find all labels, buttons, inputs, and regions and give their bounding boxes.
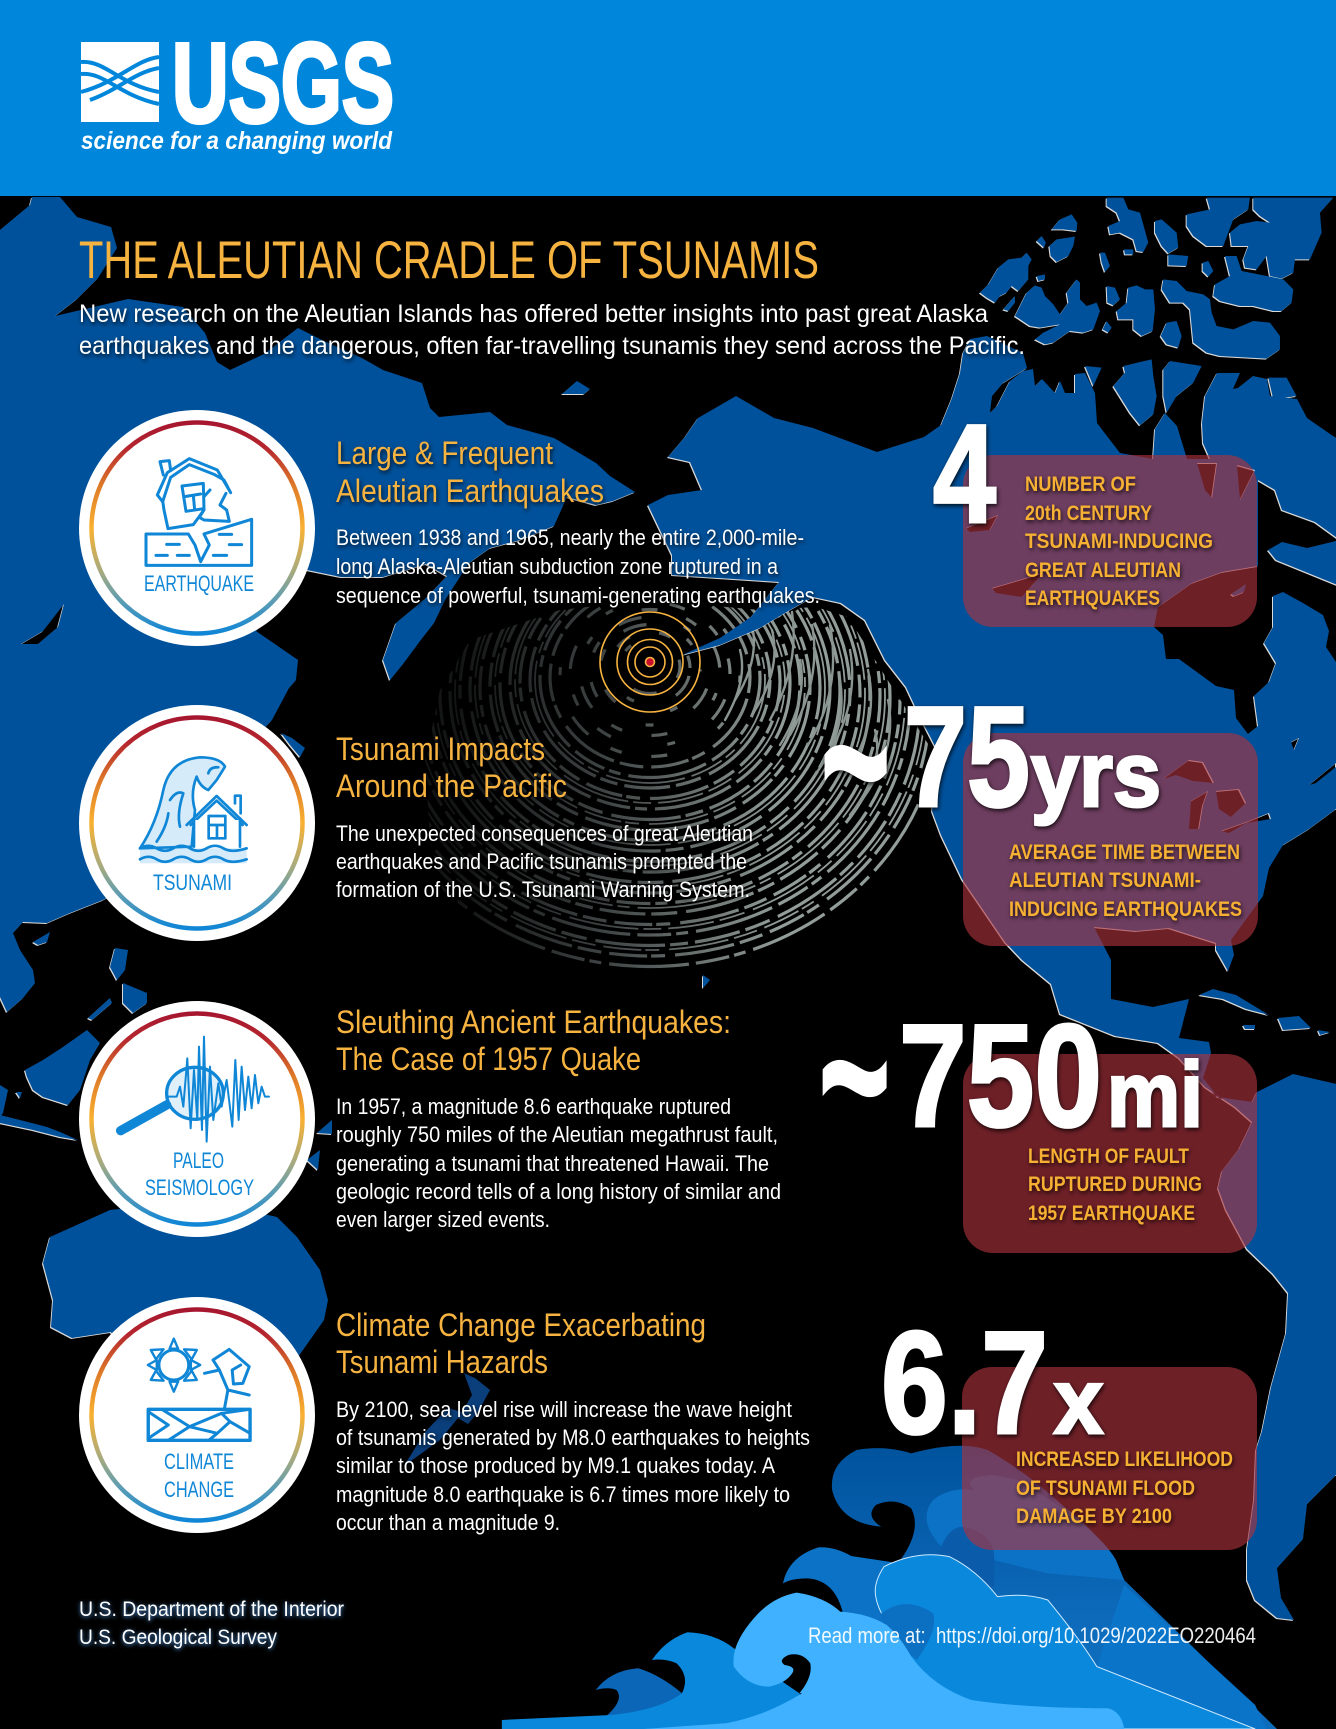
body: climate change: of tsunamis generated by M8.0 earthquakes to heights bbox=[336, 1425, 810, 1450]
body: paleoseismology: even larger sized events. bbox=[336, 1207, 550, 1232]
Australia bbox=[43, 1200, 328, 1400]
Canadian Arctic archipelago bbox=[980, 198, 1333, 425]
Caribbean islands bbox=[703, 975, 1330, 1035]
stat number: yrs bbox=[1031, 724, 1161, 826]
body: tsunami bbox=[336, 821, 753, 902]
body: earthquake: Between 1938 and 1965, nearly the entire 2,000-mile- bbox=[336, 525, 804, 550]
heading: tsunami impacts bbox=[336, 731, 567, 804]
mid wave spot bbox=[881, 1604, 934, 1660]
header band bbox=[0, 0, 1336, 196]
intro text bbox=[79, 300, 1025, 360]
icon badge: tsunami: TSUNAMI bbox=[153, 870, 232, 895]
heading: large and frequent: Large & Frequent bbox=[336, 435, 553, 471]
icon badge: climate change: CLIMATE bbox=[164, 1449, 234, 1474]
logo wordmark: USGS bbox=[172, 20, 394, 146]
heading: climate change bbox=[336, 1307, 706, 1380]
epicenter rings bbox=[600, 612, 700, 712]
New Zealand bbox=[404, 1373, 490, 1466]
section: earthquake bbox=[79, 410, 820, 646]
back wave bbox=[832, 1446, 1277, 1729]
tsunami ripple pattern bbox=[425, 602, 928, 968]
body: paleoseismology: roughly 750 miles of the Aleutian megathrust fault, bbox=[336, 1122, 778, 1147]
inner dark crest bbox=[917, 1527, 994, 1587]
section: climate change bbox=[79, 1297, 810, 1535]
body: climate change bbox=[336, 1397, 810, 1535]
stat caption bbox=[1028, 1145, 1202, 1225]
heading: large and frequent bbox=[336, 435, 604, 509]
heading: climate change: Tsunami Hazards bbox=[336, 1344, 548, 1380]
stat number: x bbox=[1054, 1351, 1103, 1453]
body: earthquake: sequence of powerful, tsunami-generating earthquakes. bbox=[336, 583, 820, 608]
Asia bbox=[0, 197, 635, 1012]
stat caption: RUPTURED DURING bbox=[1028, 1173, 1202, 1196]
stat caption: INDUCING EARTHQUAKES bbox=[1009, 898, 1242, 921]
logo tagline: science for a changing world bbox=[81, 127, 393, 155]
stat caption: GREAT ALEUTIAN bbox=[1025, 559, 1181, 582]
section: paleoseismology bbox=[79, 1001, 781, 1237]
title: THE ALEUTIAN CRADLE OF TSUNAMIS bbox=[79, 231, 819, 290]
heading: sleuthing ancient earthquakes bbox=[336, 1004, 731, 1077]
stat caption: 1957 EARTHQUAKE bbox=[1028, 1202, 1195, 1225]
USGS logo bbox=[81, 20, 394, 155]
body: paleoseismology: geologic record tells of a long history of similar and bbox=[336, 1179, 781, 1204]
body: earthquake bbox=[336, 525, 820, 608]
stat panel: 75 years bbox=[821, 643, 1258, 946]
heading: large and frequent: Aleutian Earthquakes bbox=[336, 473, 604, 509]
far left small wave bbox=[596, 1668, 682, 1720]
Asian islands bbox=[0, 381, 590, 1170]
front wave bbox=[644, 1593, 1124, 1729]
stat number: 75 bbox=[904, 678, 1030, 837]
stat number: 4 bbox=[933, 395, 996, 552]
stat caption: DAMAGE BY 2100 bbox=[1016, 1505, 1172, 1528]
stat box bbox=[962, 1367, 1257, 1550]
stat box bbox=[963, 1054, 1257, 1253]
mid wave bbox=[875, 1555, 1255, 1729]
heading: sleuthing ancient earthquakes: Sleuthing Ancient Earthquakes: bbox=[336, 1004, 731, 1040]
back wave inner crest bbox=[927, 1475, 1124, 1580]
body: paleoseismology bbox=[336, 1094, 781, 1232]
icon badge: earthquake bbox=[79, 410, 315, 646]
stat panel: 6.7 times bbox=[881, 1301, 1257, 1550]
body: climate change: By 2100, sea level rise will increase the wave height bbox=[336, 1397, 792, 1422]
stat number: 750 bbox=[899, 994, 1102, 1157]
heading: climate change: Climate Change Exacerbating bbox=[336, 1307, 706, 1343]
icon badge: paleoseismology bbox=[79, 1001, 315, 1237]
intro text: earthquakes and the dangerous, often far-travelling tsunamis they send across the Pacific. bbox=[79, 332, 1025, 360]
heading: sleuthing ancient earthquakes: The Case of 1957 Quake bbox=[336, 1041, 641, 1077]
body: climate change: similar to those produced by M9.1 quakes today. A bbox=[336, 1453, 775, 1478]
body: tsunami: The unexpected consequences of great Aleutian bbox=[336, 821, 753, 846]
stat box bbox=[963, 733, 1258, 946]
left back wave bbox=[783, 1547, 895, 1633]
intro text: New research on the Aleutian Islands has offered better insights into past great Alaska bbox=[79, 300, 988, 328]
icon badge: paleoseismology: PALEO bbox=[173, 1148, 224, 1173]
stat panel: 750 miles bbox=[819, 958, 1257, 1253]
stat caption: OF TSUNAMI FLOOD bbox=[1016, 1477, 1195, 1500]
footer agency text: U.S. Department of the Interior bbox=[79, 1598, 344, 1621]
stat caption: 20th CENTURY bbox=[1025, 502, 1152, 525]
icon badge: climate change bbox=[79, 1297, 315, 1533]
stat number bbox=[819, 958, 1203, 1193]
footer agency text bbox=[79, 1598, 344, 1649]
heading: tsunami impacts: Tsunami Impacts bbox=[336, 731, 545, 767]
stat caption bbox=[1009, 841, 1242, 921]
icon badge: tsunami bbox=[79, 705, 315, 941]
icon badge: paleoseismology: SEISMOLOGY bbox=[145, 1175, 254, 1200]
read more link text: Read more at: https://doi.org/10.1029/2022EO220464 bbox=[808, 1623, 1256, 1648]
stat caption: EARTHQUAKES bbox=[1025, 587, 1160, 610]
stat caption: ALEUTIAN TSUNAMI- bbox=[1009, 869, 1201, 892]
stat panel: 4 bbox=[933, 395, 1257, 627]
stat number bbox=[821, 643, 1161, 878]
North and South America with Hudson Bay and lakes bbox=[648, 336, 1336, 1620]
body: tsunami: formation of the U.S. Tsunami Warning System. bbox=[336, 877, 750, 902]
left mid wave bbox=[502, 1632, 818, 1729]
body: paleoseismology: generating a tsunami that threatened Hawaii. The bbox=[336, 1151, 769, 1176]
body: tsunami: earthquakes and Pacific tsunamis prompted the bbox=[336, 849, 747, 874]
stat caption bbox=[1016, 1448, 1233, 1528]
stat caption: TSUNAMI-INDUCING bbox=[1025, 530, 1213, 553]
stat caption: LENGTH OF FAULT bbox=[1028, 1145, 1189, 1168]
stat caption bbox=[1025, 473, 1213, 610]
body: climate change: magnitude 8.0 earthquake is 6.7 times more likely to bbox=[336, 1482, 790, 1507]
right slope bbox=[1097, 1585, 1266, 1729]
Hudson Bay island bbox=[1231, 584, 1246, 596]
stat box bbox=[963, 455, 1257, 627]
icon badge: climate change: CHANGE bbox=[164, 1477, 234, 1502]
stat number: 6.7 bbox=[881, 1301, 1048, 1464]
ocean wave illustration bbox=[502, 1446, 1277, 1729]
stat number: ~ bbox=[821, 643, 890, 878]
stat caption: AVERAGE TIME BETWEEN bbox=[1009, 841, 1240, 864]
logo wave mark bbox=[81, 42, 159, 122]
body: paleoseismology: In 1957, a magnitude 8.6 earthquake ruptured bbox=[336, 1094, 731, 1119]
stat caption: INCREASED LIKELIHOOD bbox=[1016, 1448, 1233, 1471]
footer agency text: U.S. Geological Survey bbox=[79, 1626, 277, 1649]
stat number: ~ bbox=[819, 958, 890, 1193]
stat number: mi bbox=[1107, 1044, 1203, 1146]
stat caption: NUMBER OF bbox=[1025, 473, 1136, 496]
heading: tsunami impacts: Around the Pacific bbox=[336, 768, 567, 804]
icon badge: earthquake: EARTHQUAKE bbox=[144, 571, 254, 596]
body: earthquake: long Alaska-Aleutian subduction zone ruptured in a bbox=[336, 554, 779, 579]
section: tsunami bbox=[79, 705, 753, 941]
body: climate change: occur than a magnitude 9. bbox=[336, 1510, 560, 1535]
